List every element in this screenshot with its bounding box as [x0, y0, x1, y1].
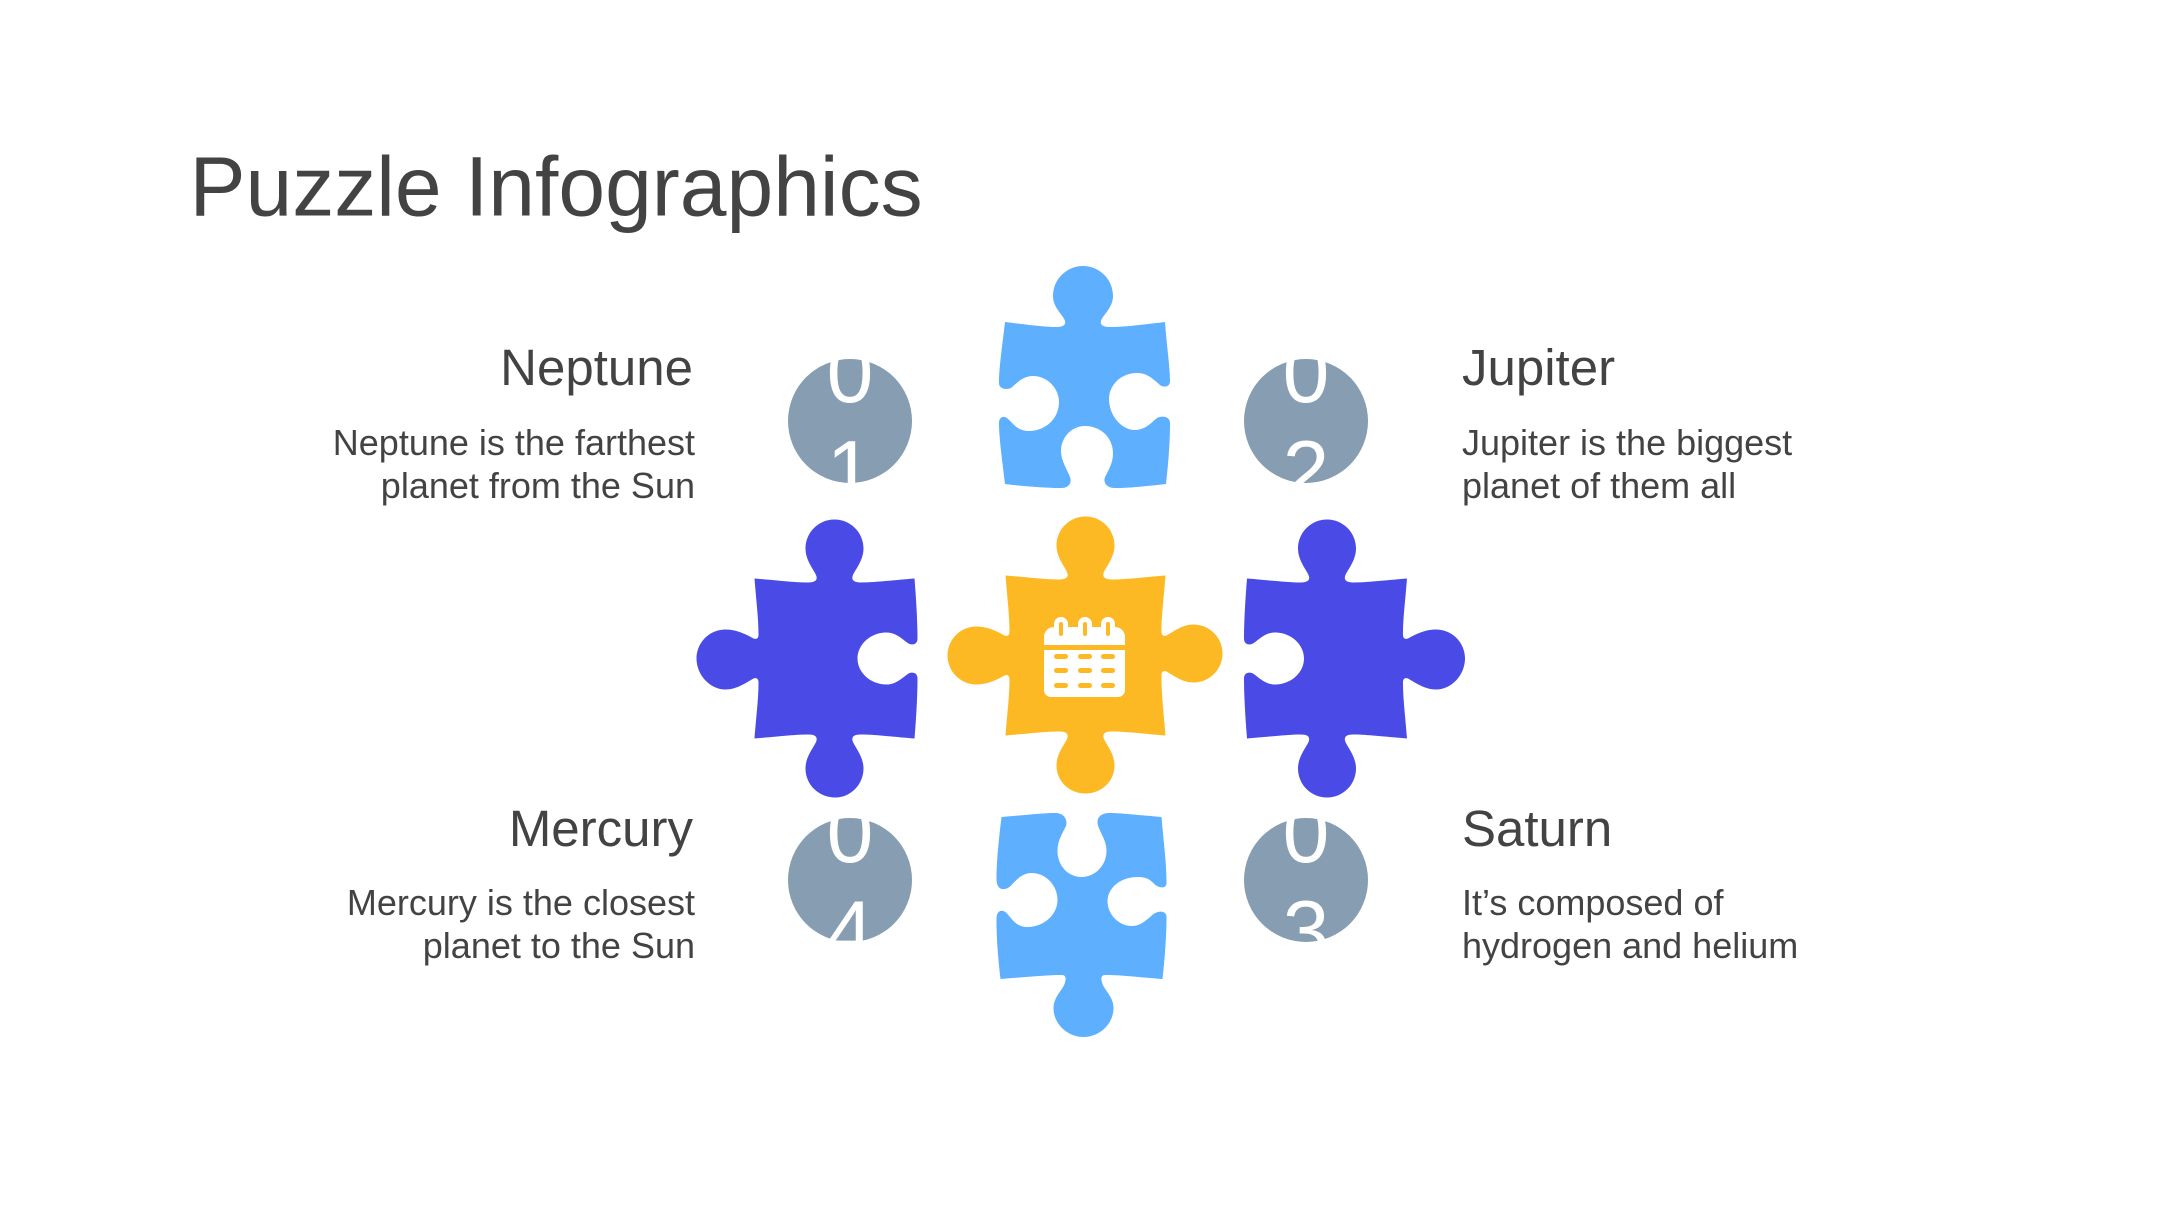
text block: Jupiter: planet of them all — [1462, 465, 1736, 506]
text block: Neptune — [333, 339, 695, 506]
text block: Saturn: Saturn — [1462, 800, 1612, 857]
number badge 03 — [1244, 786, 1368, 978]
number badge 01: 0 — [827, 326, 873, 420]
text block: Mercury — [347, 800, 695, 966]
number badge 02: 0 — [1283, 326, 1329, 420]
text block: Neptune: Neptune is the farthest — [333, 422, 695, 463]
puzzle piece: top light blue — [999, 266, 1170, 488]
text block: Mercury: planet to the Sun — [423, 925, 695, 966]
puzzle piece: bottom light blue — [996, 813, 1166, 1037]
text block: Neptune: planet from the Sun — [381, 465, 695, 506]
number badge 04: 0 — [827, 786, 873, 880]
number badge 04 — [788, 786, 912, 978]
icon: calendar — [1044, 617, 1125, 697]
number badge 03: 3 — [1283, 884, 1329, 978]
number badge 01: 1 — [827, 424, 873, 518]
puzzle piece: center yellow — [948, 516, 1222, 794]
text block: Neptune: Neptune — [500, 339, 693, 396]
text block: Jupiter — [1462, 339, 1792, 506]
text block: Saturn — [1462, 800, 1798, 966]
number badge 03: 0 — [1283, 786, 1329, 880]
puzzle piece: left purple — [696, 520, 918, 798]
text block: Saturn: hydrogen and helium — [1462, 925, 1798, 966]
text block: Mercury: Mercury is the closest — [347, 882, 695, 923]
text block: Jupiter: Jupiter — [1462, 339, 1615, 396]
number badge 04: 4 — [827, 884, 873, 978]
text block: Mercury: Mercury — [509, 800, 693, 857]
number badge 02: 2 — [1283, 424, 1329, 518]
text block: Jupiter: Jupiter is the biggest — [1462, 422, 1792, 463]
number badge 02 — [1244, 326, 1368, 518]
puzzle piece: right purple — [1244, 520, 1465, 798]
text block: Saturn: It’s composed of — [1462, 882, 1724, 923]
title: Puzzle Infographics — [190, 140, 923, 234]
number badge 01 — [788, 326, 912, 518]
